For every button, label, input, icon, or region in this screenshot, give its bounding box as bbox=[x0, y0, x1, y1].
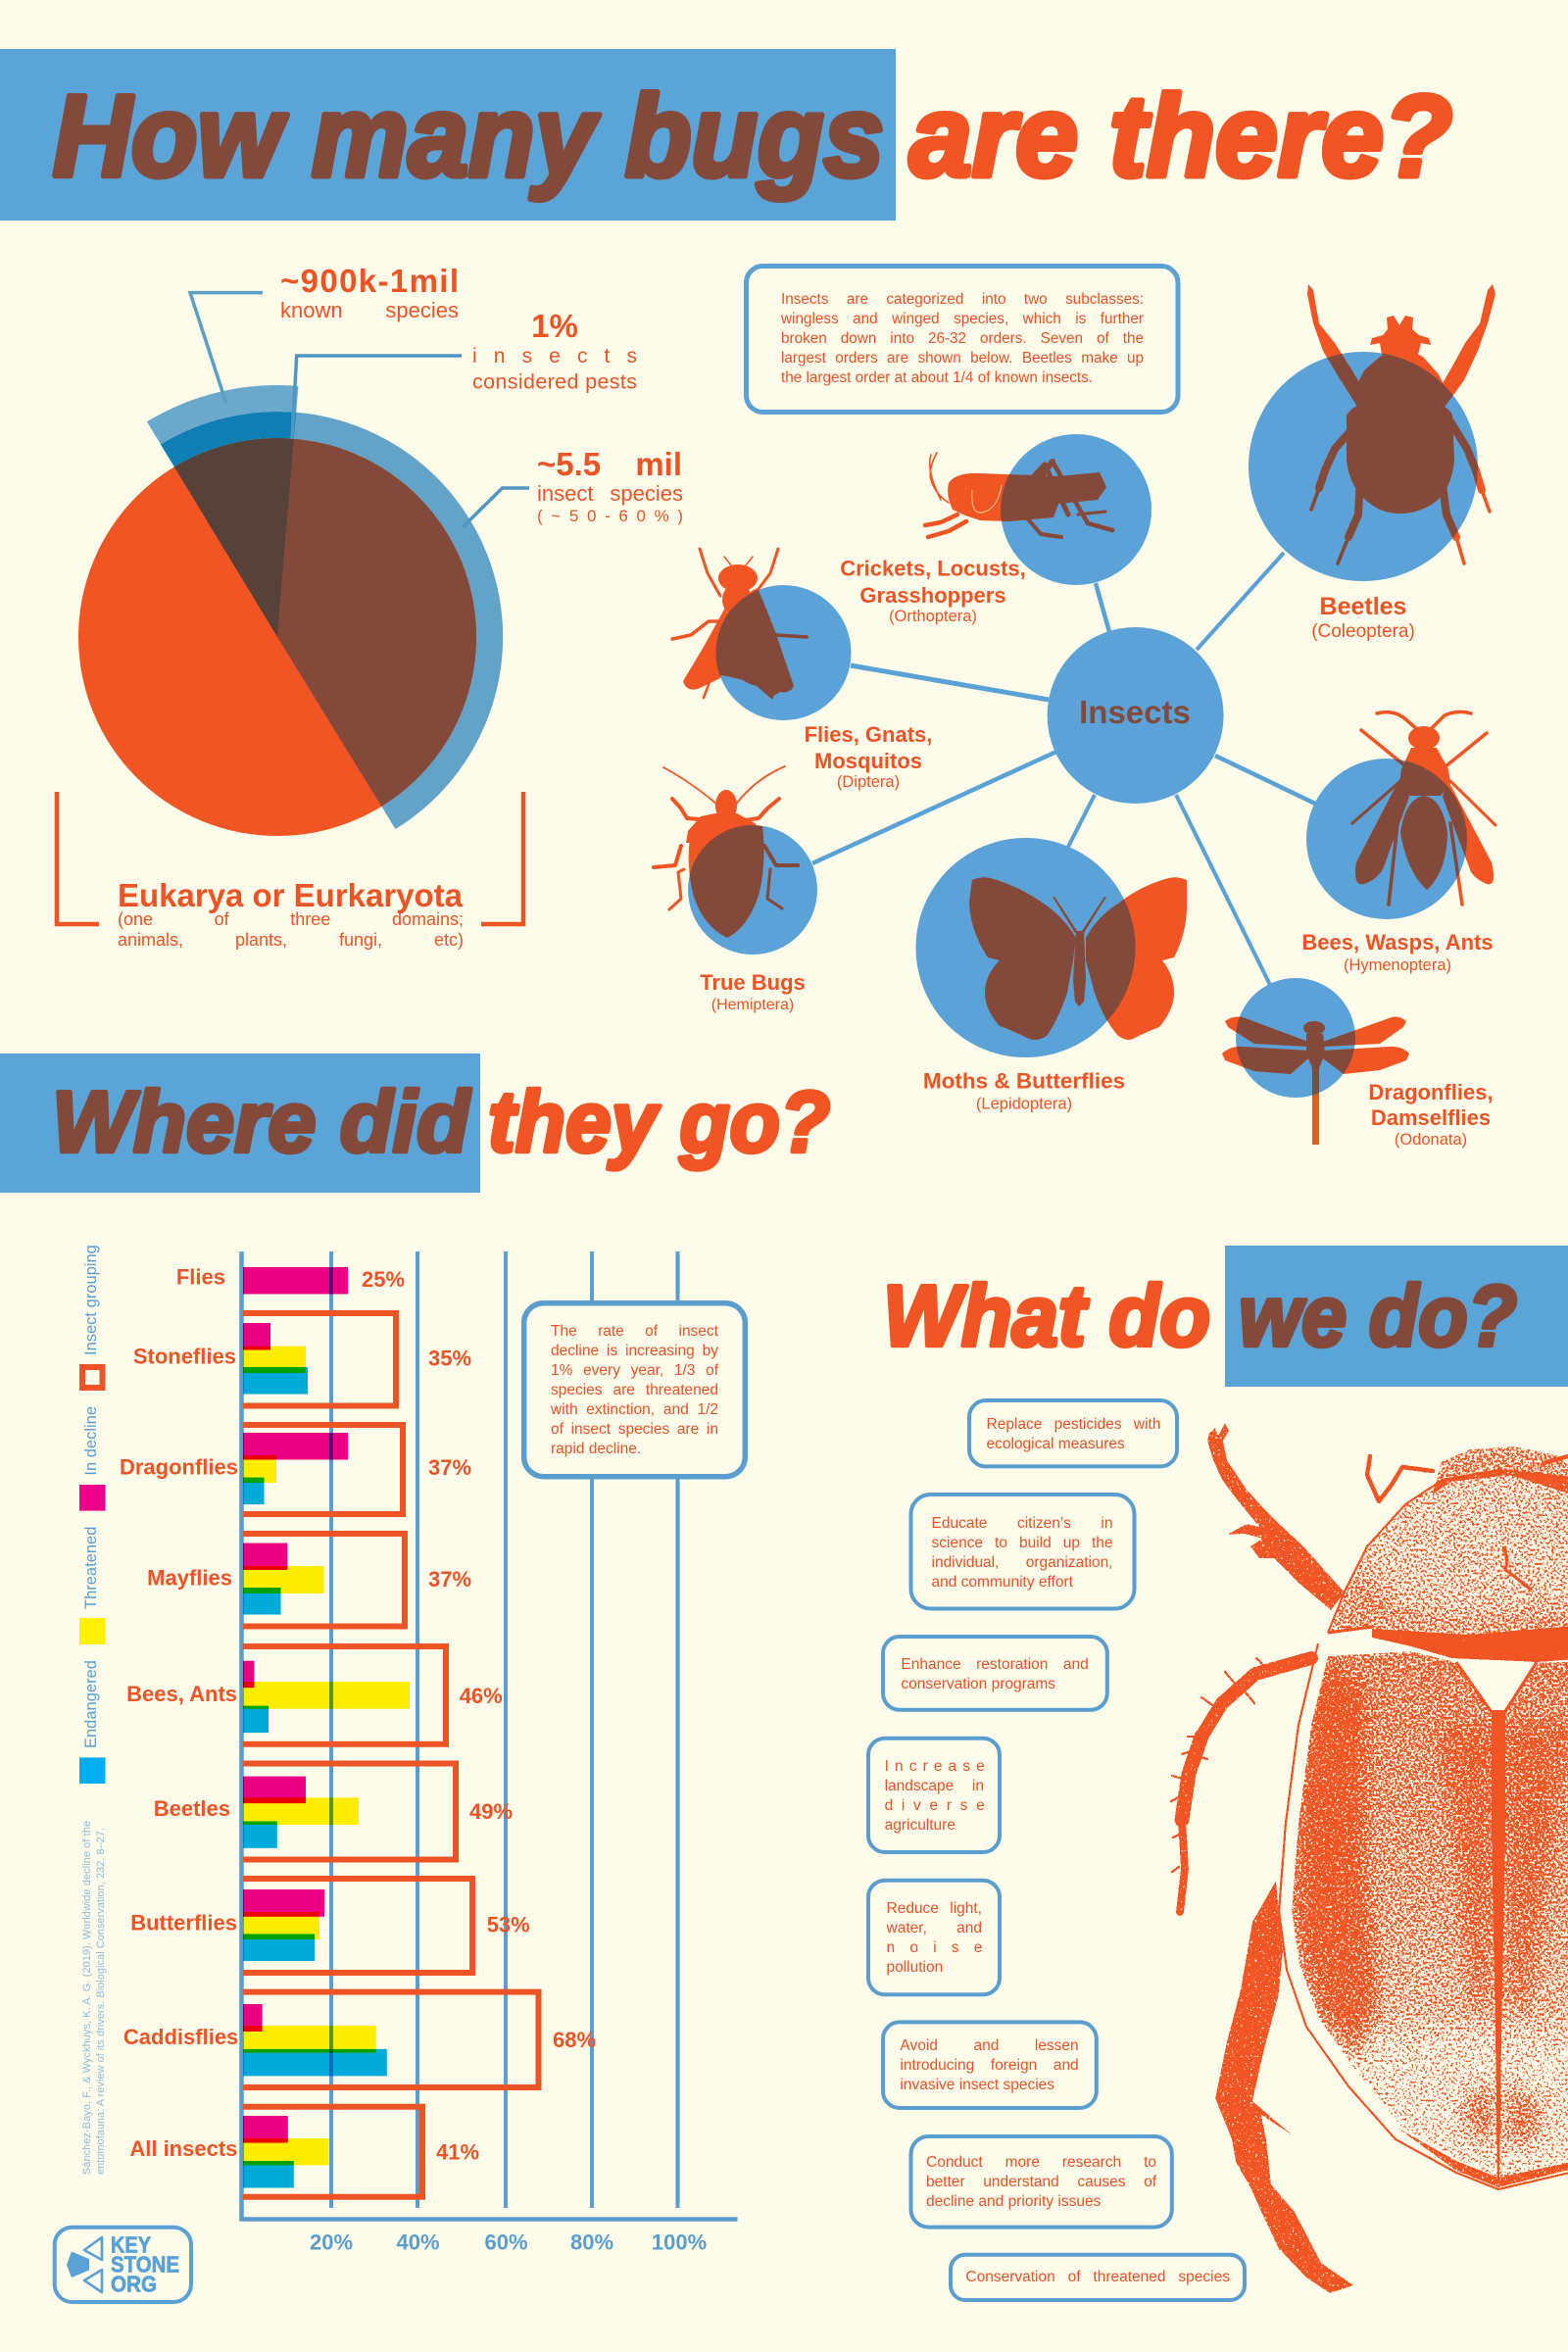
axis labels: 40% bbox=[396, 2230, 440, 2255]
stat: pests: considered pests bbox=[472, 370, 637, 394]
info box: subclasses: the largest order at about 1/4 of known insects. bbox=[781, 369, 1093, 386]
beetle: scutellum outline bbox=[1456, 1662, 1537, 1722]
leader line: insect species bbox=[463, 488, 529, 527]
action box: research: decline and priority issues bbox=[926, 2193, 1101, 2210]
label: butterflies: Moths & Butterflies bbox=[923, 1069, 1125, 1094]
caption: Eukarya bbox=[118, 877, 464, 953]
icon: butterfly bbox=[915, 838, 1187, 1057]
node: Insects: Insects bbox=[1079, 694, 1191, 730]
beetle: front leg bbox=[1207, 1423, 1345, 1610]
icon: cricket bbox=[925, 434, 1152, 585]
action box: conservation bbox=[951, 2255, 1245, 2300]
heading band bbox=[1225, 1246, 1568, 1387]
row: Beetles: Beetles bbox=[154, 1796, 230, 1821]
grid lines bbox=[331, 1251, 678, 2208]
action box: restoration: conservation programs bbox=[901, 1676, 1055, 1692]
label: beetles: Beetles bbox=[1320, 593, 1406, 620]
label: crickets: Crickets, Locusts, bbox=[840, 557, 1026, 580]
stat: insect species: ( ~ 5 0 - 6 0 % ) bbox=[537, 507, 683, 525]
row: Stoneflies bbox=[133, 1313, 471, 1405]
info box: subclasses: Insects are categorized into two subclasses: bbox=[781, 291, 1144, 308]
callout: rate of decline: decline is increasing by bbox=[551, 1343, 718, 1359]
row: Dragonflies: Dragonflies bbox=[120, 1454, 238, 1480]
bracket bbox=[57, 792, 523, 924]
label: dragonflies: Damselflies bbox=[1371, 1105, 1491, 1130]
label: crickets: Grasshoppers bbox=[859, 583, 1006, 608]
label: flies bbox=[805, 722, 932, 791]
action box: pollution: pollution bbox=[886, 1959, 943, 1976]
title text: How many bugs: How many bugs bbox=[53, 73, 884, 202]
leader line: known species bbox=[190, 293, 263, 404]
row: All insects: 41% bbox=[436, 2140, 479, 2165]
row: Stoneflies: 35% bbox=[428, 1347, 471, 1370]
label: true bugs: (Hemiptera) bbox=[711, 997, 794, 1013]
row: Bees, Ants bbox=[126, 1646, 503, 1744]
label: beetles: (Coleoptera) bbox=[1311, 621, 1415, 642]
action box: invasive species: invasive insect species bbox=[900, 2077, 1054, 2093]
stat: known species: known species bbox=[280, 298, 459, 322]
heading: What do we do? bbox=[883, 1246, 1568, 1387]
stat: insect species: ~5.5 mil bbox=[537, 446, 682, 482]
action box: educate: and community effort bbox=[931, 1574, 1073, 1591]
beetle: middle leg bbox=[1171, 1658, 1311, 1912]
row: Mayflies: Mayflies bbox=[147, 1565, 232, 1590]
action box: educate: Educate citizen’s in bbox=[931, 1515, 1113, 1532]
action box: pesticides: ecological measures bbox=[986, 1436, 1125, 1452]
action box: pesticides bbox=[969, 1400, 1177, 1466]
row: Caddisflies: Caddisflies bbox=[123, 2025, 238, 2049]
action box: educate: individual, organization, bbox=[931, 1554, 1113, 1571]
action box: landscape bbox=[868, 1739, 1000, 1852]
action box: pollution: Reduce light, bbox=[886, 1900, 982, 1917]
panel: insect orders network bbox=[652, 264, 1497, 1149]
row: All insects bbox=[129, 2107, 479, 2197]
row: Flies bbox=[176, 1264, 405, 1294]
action box: invasive species: introducing foreign and bbox=[900, 2057, 1079, 2074]
callout: rate of decline: species are threatened bbox=[551, 1382, 718, 1398]
icon: dragonfly bbox=[1222, 978, 1409, 1145]
info box: subclasses: wingless and winged species, which is further bbox=[781, 311, 1144, 327]
axis labels: 100% bbox=[652, 2230, 707, 2255]
callout: rate of decline: with extinction, and 1/2 bbox=[551, 1401, 718, 1418]
citation bbox=[81, 1821, 107, 2175]
logo wordmark: ORG bbox=[111, 2272, 157, 2297]
logo wordmark bbox=[111, 2232, 179, 2297]
citation: entomofauna: A review of its drivers. Biological Conservation, 232, 8–27. bbox=[95, 1828, 107, 2175]
action box: conservation: Conservation of threatened species bbox=[965, 2269, 1230, 2285]
connector lines bbox=[812, 553, 1315, 985]
icon: fly bbox=[672, 549, 851, 720]
label: crickets bbox=[840, 557, 1026, 625]
title: How many bugs are there? bbox=[0, 49, 1452, 220]
action box: landscape: landscape in bbox=[885, 1778, 984, 1794]
pie slice: known species bbox=[174, 438, 294, 637]
stat: insect species: insect species bbox=[537, 481, 683, 506]
panel: Eukarya pie chart bbox=[55, 263, 683, 950]
row: Butterflies: Butterflies bbox=[130, 1911, 237, 1935]
beetle: hind leg bbox=[1215, 1881, 1353, 2293]
logo frame bbox=[55, 2228, 191, 2302]
row: Dragonflies bbox=[120, 1425, 471, 1514]
title text: are there?: are there? bbox=[909, 73, 1452, 202]
row: Mayflies bbox=[147, 1534, 471, 1627]
label: beetles bbox=[1311, 593, 1415, 642]
callout: rate of decline: 1% every year, 1/3 of bbox=[551, 1362, 718, 1379]
axis labels bbox=[310, 2230, 707, 2255]
axes bbox=[241, 1251, 737, 2219]
heading: Where did they go? bbox=[0, 1054, 831, 1193]
stat: known species bbox=[280, 263, 459, 325]
label: true bugs bbox=[700, 970, 806, 1013]
stat: known species: ~900k-1mil bbox=[280, 263, 459, 299]
icon: beetle bbox=[1249, 284, 1495, 581]
node: Insects bbox=[1048, 627, 1224, 804]
callout: rate of decline: of insect species are in bbox=[551, 1421, 718, 1438]
row: Caddisflies: 68% bbox=[553, 2028, 596, 2052]
row: Mayflies: 37% bbox=[428, 1567, 471, 1592]
row: All insects: All insects bbox=[129, 2136, 237, 2161]
label: flies: Mosquitos bbox=[814, 749, 922, 773]
leader line: pests bbox=[292, 356, 462, 439]
row: Beetles bbox=[154, 1764, 513, 1860]
action box: restoration bbox=[883, 1637, 1107, 1710]
action box: invasive species bbox=[883, 2022, 1097, 2108]
stat: pests bbox=[472, 308, 637, 394]
label: bees: (Hymenoptera) bbox=[1344, 956, 1451, 974]
axis labels: 80% bbox=[570, 2230, 613, 2255]
action box: research: better understand causes of bbox=[926, 2174, 1156, 2190]
beetle: elytra bbox=[1279, 1643, 1568, 2189]
row: Stoneflies: Stoneflies bbox=[133, 1345, 236, 1369]
row: Butterflies bbox=[130, 1879, 530, 1973]
row: Flies: Flies bbox=[176, 1264, 225, 1290]
axis labels: 60% bbox=[484, 2230, 528, 2255]
legend item: endangered bbox=[79, 1660, 106, 1784]
action box: landscape: agriculture bbox=[885, 1817, 956, 1834]
label: flies: (Diptera) bbox=[837, 773, 900, 791]
legend item: in decline: In decline bbox=[82, 1406, 100, 1476]
label: dragonflies bbox=[1368, 1080, 1494, 1149]
label: dragonflies: Dragonflies, bbox=[1368, 1080, 1494, 1104]
heading text: they go?: they go? bbox=[488, 1073, 830, 1170]
callout: rate of decline: The rate of insect bbox=[551, 1323, 718, 1340]
caption: Eukarya: animals, plants, fungi, etc) bbox=[118, 930, 464, 950]
label: flies: Flies, Gnats, bbox=[805, 722, 932, 747]
info box: subclasses: largest orders are shown below. Beetles make up bbox=[781, 350, 1144, 367]
label: dragonflies: (Odonata) bbox=[1395, 1131, 1467, 1149]
logo mark bbox=[67, 2237, 102, 2292]
row: Bees, Ants: 46% bbox=[460, 1684, 503, 1708]
logo: Keystone Org bbox=[53, 2225, 193, 2304]
legend item: threatened bbox=[79, 1527, 106, 1644]
beetle: midline bbox=[1492, 1710, 1505, 2178]
action box: educate bbox=[911, 1494, 1135, 1609]
legend item: threatened: Threatened bbox=[82, 1527, 100, 1609]
label: bees: Bees, Wasps, Ants bbox=[1301, 930, 1494, 955]
stat: insect species bbox=[537, 445, 683, 525]
callout: rate of decline: rapid decline. bbox=[551, 1441, 641, 1457]
action box: invasive species: Avoid and lessen bbox=[900, 2037, 1079, 2054]
illustration: stippled beetle bbox=[1170, 1423, 1568, 2293]
action box: research: Conduct more research to bbox=[926, 2154, 1156, 2171]
action box: restoration: Enhance restoration and bbox=[901, 1656, 1089, 1673]
label: crickets: (Orthoptera) bbox=[889, 608, 977, 625]
callout: rate of decline bbox=[524, 1303, 745, 1477]
panel: what we can do actions bbox=[866, 1398, 1247, 2302]
title band bbox=[0, 49, 896, 220]
label: bees bbox=[1301, 930, 1494, 974]
legend item: in decline bbox=[79, 1406, 106, 1511]
row: Flies: 25% bbox=[362, 1267, 405, 1292]
row: Caddisflies bbox=[123, 1992, 596, 2087]
action box: pollution bbox=[868, 1881, 1000, 1994]
beetle: pronotum bbox=[1328, 1470, 1568, 1637]
pie: Eukarya circle bbox=[78, 438, 476, 836]
caption: Eukarya: (one of three domains; bbox=[118, 909, 464, 929]
ring: known species inner arc bbox=[161, 412, 296, 466]
icon: true bug bbox=[654, 766, 817, 955]
row: Dragonflies: 37% bbox=[428, 1455, 471, 1480]
logo wordmark: STONE bbox=[111, 2252, 179, 2278]
label: true bugs: True Bugs bbox=[700, 970, 806, 995]
info box: subclasses bbox=[747, 267, 1178, 412]
logo wordmark: KEY bbox=[111, 2232, 151, 2258]
action box: pesticides: Replace pesticides with bbox=[986, 1416, 1160, 1433]
legend item: insect grouping bbox=[82, 1245, 102, 1388]
row: Beetles: 49% bbox=[469, 1799, 513, 1824]
ring: known species outer arc bbox=[147, 385, 298, 444]
row: Butterflies: 53% bbox=[487, 1913, 530, 1936]
info box: subclasses: broken down into 26-32 orders. Seven of the bbox=[781, 330, 1144, 347]
citation: Sánchez-Bayo, F., & Wyckhuys, K. A. G. (2019). Worldwide decline of the bbox=[81, 1821, 93, 2175]
beetle: head bbox=[1433, 1446, 1568, 1499]
action box: research bbox=[911, 2136, 1172, 2228]
heading text: Where did: Where did bbox=[52, 1073, 471, 1170]
pie slice: insects bbox=[277, 439, 476, 807]
legend item: endangered: Endangered bbox=[82, 1660, 100, 1748]
action box: pollution: water, and bbox=[886, 1920, 982, 1936]
icon: wasp bbox=[1306, 711, 1495, 919]
heading text: we do?: we do? bbox=[1239, 1267, 1517, 1364]
panel: insect decline bar chart bbox=[79, 1245, 749, 2255]
label: butterflies: (Lepidoptera) bbox=[976, 1096, 1072, 1113]
heading text: What do: What do bbox=[883, 1267, 1210, 1364]
heading band bbox=[0, 1054, 480, 1193]
axis labels: 20% bbox=[310, 2230, 353, 2255]
stat: pests: 1% bbox=[531, 308, 578, 344]
beetle: antenna bbox=[1367, 1456, 1568, 1501]
stat: pests: insects bbox=[472, 345, 637, 368]
caption: Eukarya: Eukarya or Eurkaryota bbox=[118, 877, 464, 913]
beetle: thorax band bbox=[1372, 1625, 1568, 1662]
action box: educate: science to build up the bbox=[931, 1535, 1113, 1551]
ring: insect species arc bbox=[294, 413, 503, 829]
label: butterflies bbox=[923, 1069, 1125, 1113]
row: Bees, Ants: Bees, Ants bbox=[126, 1682, 237, 1706]
legend item: insect grouping: Insect grouping bbox=[82, 1245, 100, 1355]
legend bbox=[79, 1245, 106, 1784]
